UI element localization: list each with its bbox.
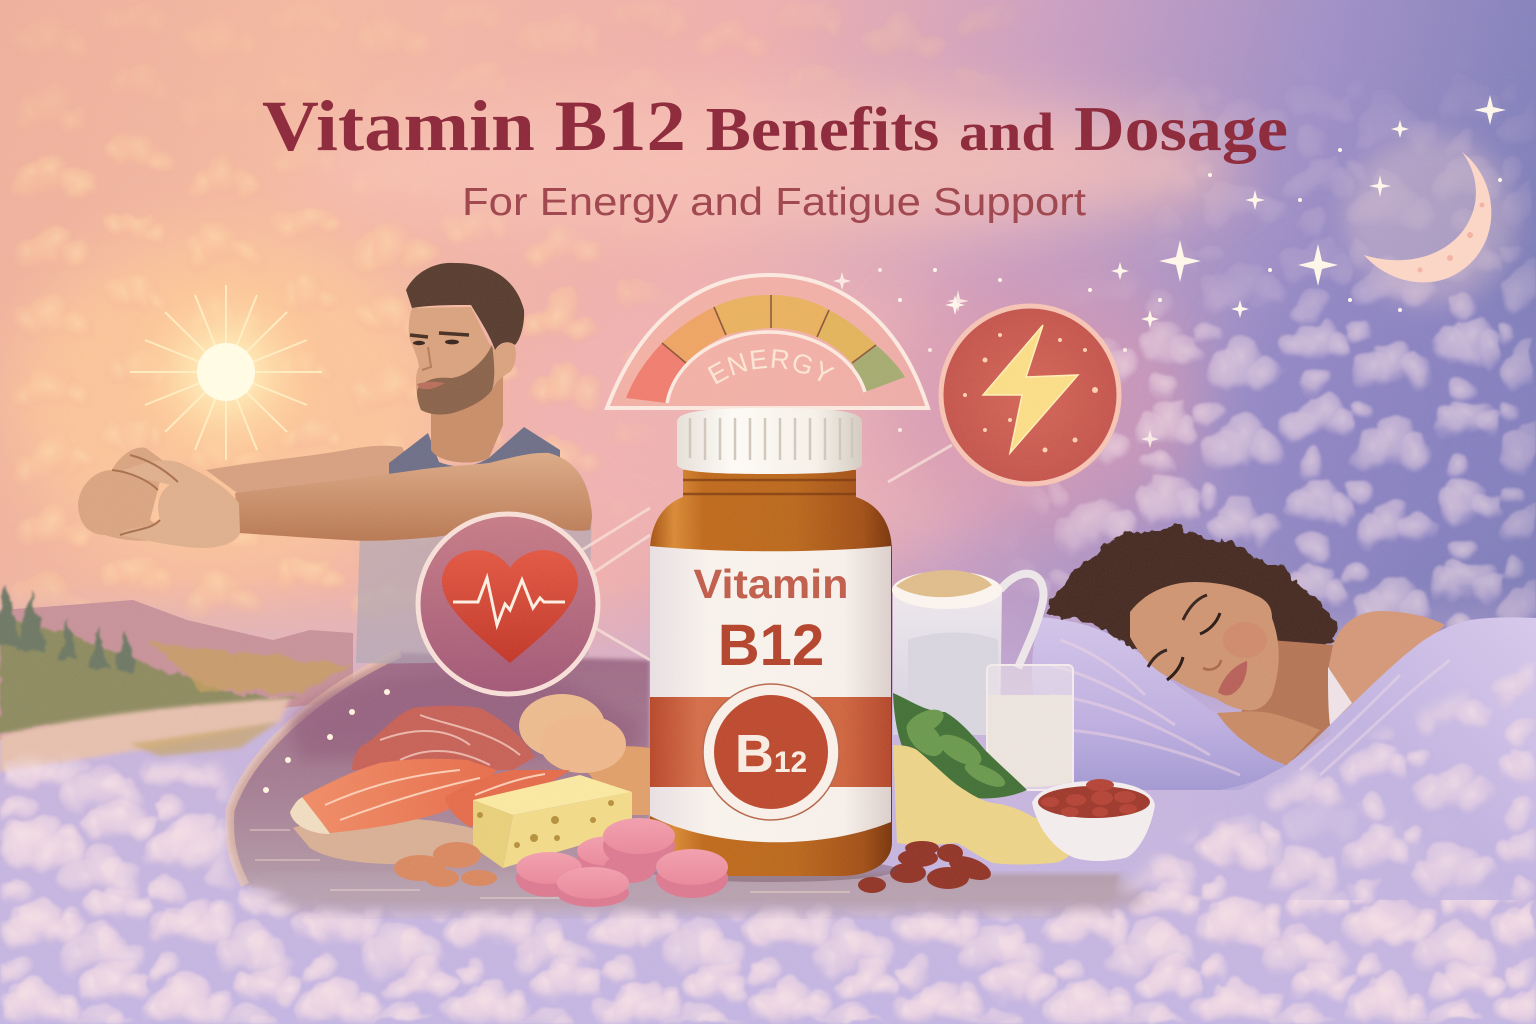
flatbread [893,745,1073,864]
foreground clouds over blanket [0,666,1536,1024]
woman: hand under cheek [1217,711,1320,765]
gauge: yellow segment [817,310,876,363]
man: near arm [235,453,592,541]
stars [898,95,1506,328]
sun [121,267,331,477]
sparkles around badges [833,268,1159,448]
woman: top strap [1328,667,1352,725]
red meat [352,706,535,770]
pink tablets [516,818,728,907]
bottle label [650,546,891,842]
man: right hand [120,460,240,548]
man stretching [78,263,592,663]
bottle cap [677,408,862,474]
label text: B12: B12 [718,613,824,678]
gauge: red segment [626,343,686,403]
energy gauge [604,273,931,410]
label text: Vitamin: Vitamin [694,561,848,607]
bottle shadow [645,858,897,882]
coffee mug [892,570,1044,735]
woman: pillow [1032,617,1287,790]
man: left hand [78,447,170,541]
man: face [409,307,516,415]
cheese block [473,775,632,868]
heart rate badge [418,514,598,694]
sleeping woman [1032,526,1536,900]
label B12 seal: B12 [735,724,807,784]
label B12 seal [703,684,839,820]
man: brows, eyes, lips [410,333,469,389]
title: Vitamin B12 Benefits and Dosage [262,86,1288,166]
gauge: label: ENERGY [708,349,835,384]
green leaves [893,693,1027,798]
man: far arm [206,446,420,495]
glass of milk [987,665,1073,790]
almond-shaped tablets [394,842,497,887]
gauge: inner arc [667,332,865,403]
pale salmon end [290,797,330,834]
landscape with hills and river [0,586,353,772]
gauge: orange segment [662,307,726,363]
woman: neck and chest [1240,640,1335,765]
gauge: amber segments [714,295,829,337]
salmon fillets [302,759,570,833]
woman: shoulder [1328,611,1445,720]
woman: eyes, brows, nose, lips [1148,595,1247,695]
man: finger lines [112,455,178,535]
label red band [650,697,891,787]
wooden board [293,817,478,864]
energy bolt badge [941,306,1119,484]
man: translucent lower torso [356,510,592,663]
loose beans [858,841,994,893]
man: beard [417,345,494,415]
eggs [519,694,626,773]
crescent moon [1345,135,1515,305]
gauge: outer dial [607,275,928,408]
subtitle: For Energy and Fatigue Support [462,181,1086,224]
man: hair [406,263,524,350]
man: neck [431,375,503,463]
woman: curly hair [1047,526,1338,652]
bottle glass [650,470,892,876]
gauge: green segment [852,345,905,392]
bowl of red beans [1032,779,1155,861]
man: tank top [389,427,560,490]
woman: cheek [1223,622,1267,658]
woman: blanket [1130,617,1536,900]
vitamin bottle [645,408,897,882]
translucent dome with ground under the food [230,653,1150,912]
connector lines [582,445,952,660]
bread behind cheese [572,746,650,815]
woman: face [1130,582,1279,710]
